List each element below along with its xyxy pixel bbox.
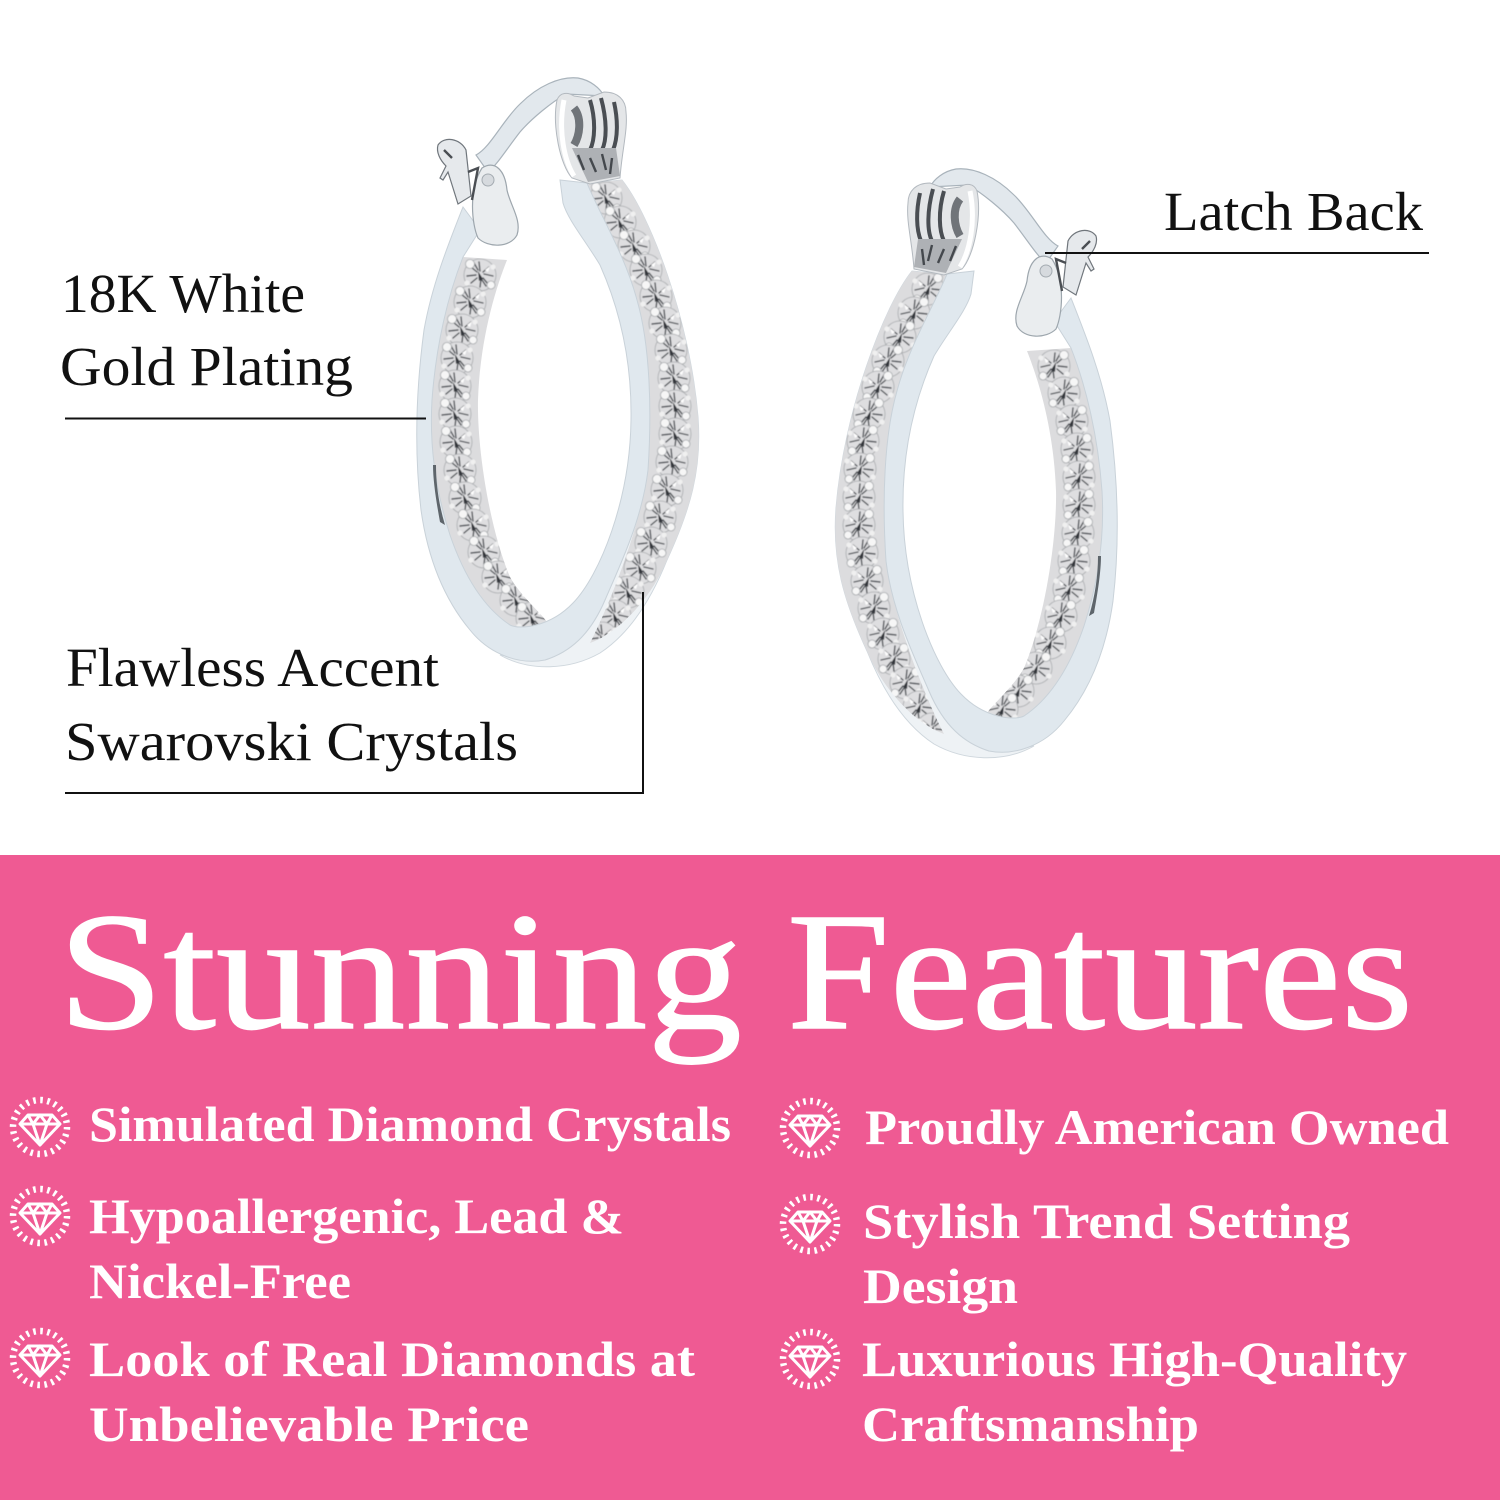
latch paddle <box>472 165 518 245</box>
feature: Hypoallergenic: Hypoallergenic, Lead & <box>89 1188 624 1244</box>
feature: Look of Real Diamonds <box>13 1331 695 1452</box>
white background <box>0 0 1500 855</box>
feature: Simulated Diamond Crystals: Simulated Diamond Crystals <box>89 1096 731 1152</box>
feature: Stylish Trend Setting Design: Stylish Trend Setting <box>863 1193 1350 1249</box>
callout: 18K White Gold Plating: Gold Plating <box>60 336 353 397</box>
feature: Hypoallergenic: Nickel-Free <box>89 1253 351 1309</box>
feature: Luxurious High-Quality Craftsmanship: Luxurious High-Quality <box>862 1331 1407 1387</box>
callout: Latch Back: Latch Back <box>1164 181 1424 242</box>
title: Features <box>787 879 1413 1065</box>
panel: features <box>0 855 1500 1500</box>
polished band <box>417 180 650 661</box>
callout: Flawless Accent Swarovski Crystals <box>65 592 643 793</box>
right crystal strip <box>570 170 710 660</box>
left crystal strip <box>425 250 555 635</box>
feature: Stylish Trend Setting Design: Design <box>863 1258 1018 1314</box>
left earring <box>417 78 710 667</box>
right earring <box>824 169 1117 758</box>
callout: Flawless Accent Swarovski Crystals: Swarovski Crystals <box>65 711 518 772</box>
title: Stunning <box>58 879 742 1065</box>
feature: Look of Real Diamonds: Look of Real Diamonds at <box>89 1331 695 1387</box>
callout: 18K White Gold Plating <box>60 263 426 418</box>
title <box>58 879 1413 1065</box>
hook arm <box>476 78 604 172</box>
feature: Proudly American Owned: Proudly American Owned <box>865 1099 1449 1155</box>
feature: Luxurious High-Quality Craftsmanship: Craftsmanship <box>862 1396 1199 1452</box>
band shadow accents <box>433 465 445 525</box>
feature: Luxurious High-Quality Craftsmanship <box>783 1331 1407 1452</box>
feature: Stylish Trend Setting Design <box>783 1193 1350 1314</box>
feature: Hypoallergenic <box>13 1188 624 1309</box>
callout: Flawless Accent Swarovski Crystals: Flawless Accent <box>66 637 439 698</box>
feature: Look of Real Diamonds: Unbelievable Price <box>89 1396 529 1452</box>
latch pin <box>437 139 494 204</box>
callout: 18K White Gold Plating: 18K White <box>61 263 305 324</box>
hinge <box>555 92 626 184</box>
back body <box>500 180 699 667</box>
